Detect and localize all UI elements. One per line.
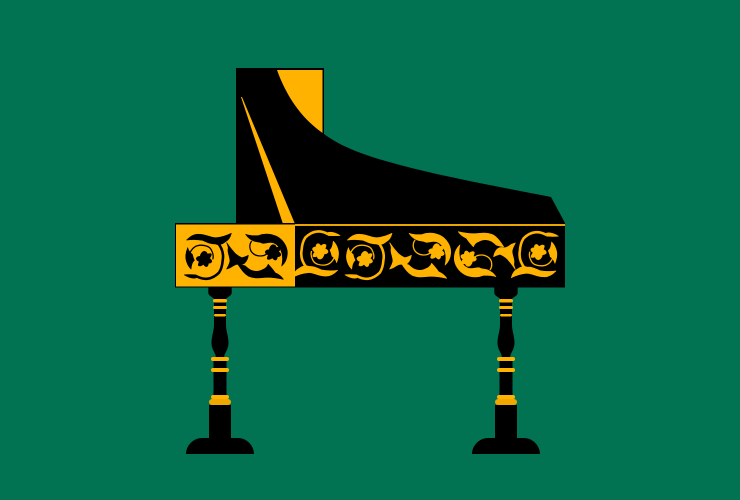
left leg: [186, 287, 254, 454]
yellow keyboard panel: [176, 224, 295, 286]
yellow top trim line: [295, 224, 565, 226]
yellow soundboard wedge: [241, 97, 295, 224]
pedestal foot: [472, 405, 540, 454]
turned column: [494, 287, 518, 395]
yellow rings: [209, 299, 231, 405]
pedestal foot: [186, 405, 254, 454]
harpsichord lid body: [236, 68, 565, 226]
yellow curved lid corner: [277, 70, 322, 133]
ornament: yellow scrollwork on black case: [293, 231, 558, 279]
case front: [175, 223, 565, 288]
right leg: [472, 287, 540, 454]
turned column: [208, 287, 232, 395]
yellow rings: [495, 299, 517, 405]
ornament: black scrollwork on yellow panel: [184, 233, 287, 279]
black case section: [175, 223, 565, 288]
